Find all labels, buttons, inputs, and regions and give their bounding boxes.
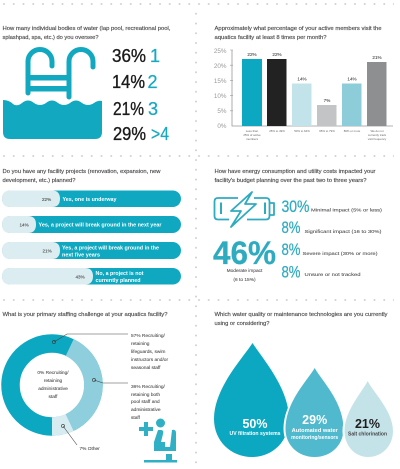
bar: 21%: 21% — [42, 248, 52, 254]
bar: 14%: 14% — [20, 222, 29, 228]
heading: energy question — [214, 169, 376, 184]
donut center label: administrative — [38, 386, 68, 392]
stat: 30% minimal impact — [282, 198, 382, 216]
bar chart: 65% to 79% — [319, 129, 335, 133]
stat: 30% minimal impact: Minimal impact (5% or less) — [311, 208, 382, 214]
bar: 43%: No, a project is not — [96, 271, 144, 277]
callout: 7% other — [61, 424, 100, 452]
donut center label: retaining — [44, 378, 63, 384]
donut center label: staff — [49, 394, 58, 400]
panel: energy impact — [213, 169, 382, 283]
stat: 30% minimal impact: 30% — [282, 198, 310, 216]
stat: 46% moderate impact: Moderate impact — [227, 268, 263, 274]
bar: 22%: Yes, one is underway — [62, 197, 117, 203]
panel: facility projects — [2, 169, 181, 284]
panel: visit frequency — [214, 26, 393, 141]
drop: 21% salt chlorination: 21% — [355, 417, 380, 431]
icon: staff with medical cross — [139, 418, 177, 462]
heading: visit frequency question — [214, 26, 382, 41]
bar chart: 80% or more — [344, 129, 361, 133]
callout: 57%: instructors and/or — [131, 357, 168, 363]
callout: 57%: lifeguards, swim — [131, 349, 165, 355]
bar: 21%: next five years — [62, 252, 100, 258]
drop: 50% UV filtration — [214, 343, 289, 457]
bar: 43%: 43% — [76, 274, 85, 280]
bar: 22% — [2, 190, 181, 207]
bar: 21% — [2, 242, 181, 259]
bar: 14%: Yes, a project will break ground in the next year — [38, 222, 162, 228]
callout: 36%: administrative — [131, 407, 161, 413]
stat: 8% unsure: Unsure or not tracked — [304, 272, 361, 278]
stat: 21% 3: 21% — [113, 99, 144, 119]
stat: 8% significant impact — [282, 219, 382, 237]
stat: 8% severe impact: 8% — [282, 241, 301, 259]
bar chart: 25% of active — [243, 133, 261, 137]
drop: 29% automated: Automated water — [292, 428, 338, 434]
heading: facility projects question: development, etc.) planned? — [2, 178, 76, 184]
panel: pool bodies of water — [2, 26, 171, 144]
bar chart: currently track — [368, 133, 387, 137]
drop: 29% automated — [284, 368, 346, 458]
heading: bodies of water question: How many individual bodies of water (lap pool, recreational pool, — [2, 26, 171, 32]
callout: 36%: pool staff and — [131, 399, 160, 405]
bar: 14% — [2, 216, 181, 233]
drop: 29% automated: 29% — [302, 413, 327, 427]
bar chart: 50% to 64% — [294, 129, 310, 133]
bar chart: 25% — [214, 48, 227, 55]
donut chart — [10, 344, 94, 426]
drop: 29% automated: monitoring/sensors — [291, 435, 338, 441]
bar chart — [214, 48, 393, 141]
callout: 57% — [52, 333, 168, 371]
donut center label — [37, 370, 69, 400]
stat: 29% >4 — [113, 124, 169, 144]
stat: 8% severe impact: Severe impact (30% or more) — [302, 251, 378, 257]
bar chart: 14% — [347, 76, 357, 82]
icon: pool ladder and water — [3, 50, 102, 139]
stat: 8% unsure: 8% — [282, 264, 301, 282]
stat: 8% unsure — [282, 264, 361, 282]
bar: 43% — [2, 268, 181, 284]
donut center label: 0% Recruiting/ — [37, 370, 69, 376]
callout: 57%: 57% Recruiting/ — [131, 333, 166, 339]
bar chart: 21% — [372, 55, 382, 60]
drop: 21% salt chlorination — [342, 381, 393, 457]
heading: energy question: facility's budget planning over the past two to three years? — [214, 178, 366, 184]
bar: 21%: Yes, a project will break ground in the — [62, 246, 159, 252]
heading: staffing question: What is your primary staffing challenge at your aquatics facility? — [2, 312, 168, 318]
bar chart: 15% — [214, 78, 227, 85]
heading: water technology question: Which water quality or maintenance technologies are you currently — [214, 312, 388, 318]
bar chart: 0% — [217, 123, 227, 130]
bar chart: 22% — [272, 52, 282, 57]
drop: 50% UV filtration: UV filtration systems — [230, 431, 281, 437]
callout: 36% — [92, 378, 166, 421]
heading: bodies of water question — [2, 26, 171, 41]
stat: 8% significant impact: Significant impact (16 to 30%) — [304, 229, 382, 235]
bar chart: 25% to 49% — [269, 129, 285, 133]
callout: 57%: retaining — [131, 341, 150, 347]
bar chart: We do not — [370, 129, 384, 133]
bar chart: 22% — [247, 52, 257, 57]
stat: 36% 1: 36% — [112, 46, 146, 66]
stat: 14% 2: 2 — [148, 72, 158, 92]
heading: water technology question — [214, 312, 388, 327]
heading: water technology question: using or considering? — [214, 321, 270, 327]
bar chart: 5% — [217, 108, 227, 115]
stat: 29% >4: >4 — [151, 124, 169, 144]
bar chart: visit frequency — [368, 137, 387, 141]
drop: 50% UV filtration: 50% — [242, 417, 268, 431]
heading: bodies of water question: splashpad, spa, etc.) do you oversee? — [2, 35, 98, 41]
bar chart: 14% — [297, 76, 307, 82]
bar chart: 10% — [214, 93, 227, 100]
bar: 43%: currently planned — [96, 278, 140, 284]
callout: 7% other: 7% Other — [80, 446, 100, 452]
stat: 8% significant impact: 8% — [282, 219, 301, 237]
heading: facility projects question: Do you have any facility projects (renovation, expansion, new — [2, 169, 161, 175]
stat: 8% severe impact — [282, 241, 378, 259]
stat: 21% 3: 3 — [148, 99, 158, 119]
bar chart: 20% — [214, 63, 227, 70]
stat: 36% 1: 1 — [150, 46, 160, 66]
bar chart: members — [246, 137, 259, 141]
heading: visit frequency question: aquatics facility at least 8 times per month? — [214, 35, 326, 41]
stat: 29% >4: 29% — [113, 124, 146, 144]
callout: 36%: retaining both — [131, 392, 160, 398]
drop: 21% salt chlorination: Salt chlorination — [348, 432, 387, 438]
bar: 22%: 22% — [42, 197, 51, 202]
stat: 46% moderate impact: (6 to 15%) — [233, 277, 256, 283]
bar chart: Less than — [246, 129, 259, 133]
heading: energy question: How have energy consumption and utility costs impacted your — [214, 169, 376, 175]
callout: 36%: 36% Recruiting/ — [131, 384, 166, 390]
callout: 57%: seasonal staff — [131, 365, 161, 371]
panel: staffing challenge — [2, 312, 177, 462]
callout: 36%: staff — [131, 415, 141, 421]
icon: battery with lightning bolt — [214, 192, 274, 227]
stat: 46% moderate impact: 46% — [213, 235, 276, 271]
panel: water technologies — [214, 312, 393, 458]
heading: facility projects question — [2, 169, 161, 184]
stat: 14% 2: 14% — [112, 72, 145, 92]
bar chart: 7% — [324, 98, 330, 103]
heading: visit frequency question: Approximately what percentage of your active members visit the — [214, 26, 382, 32]
